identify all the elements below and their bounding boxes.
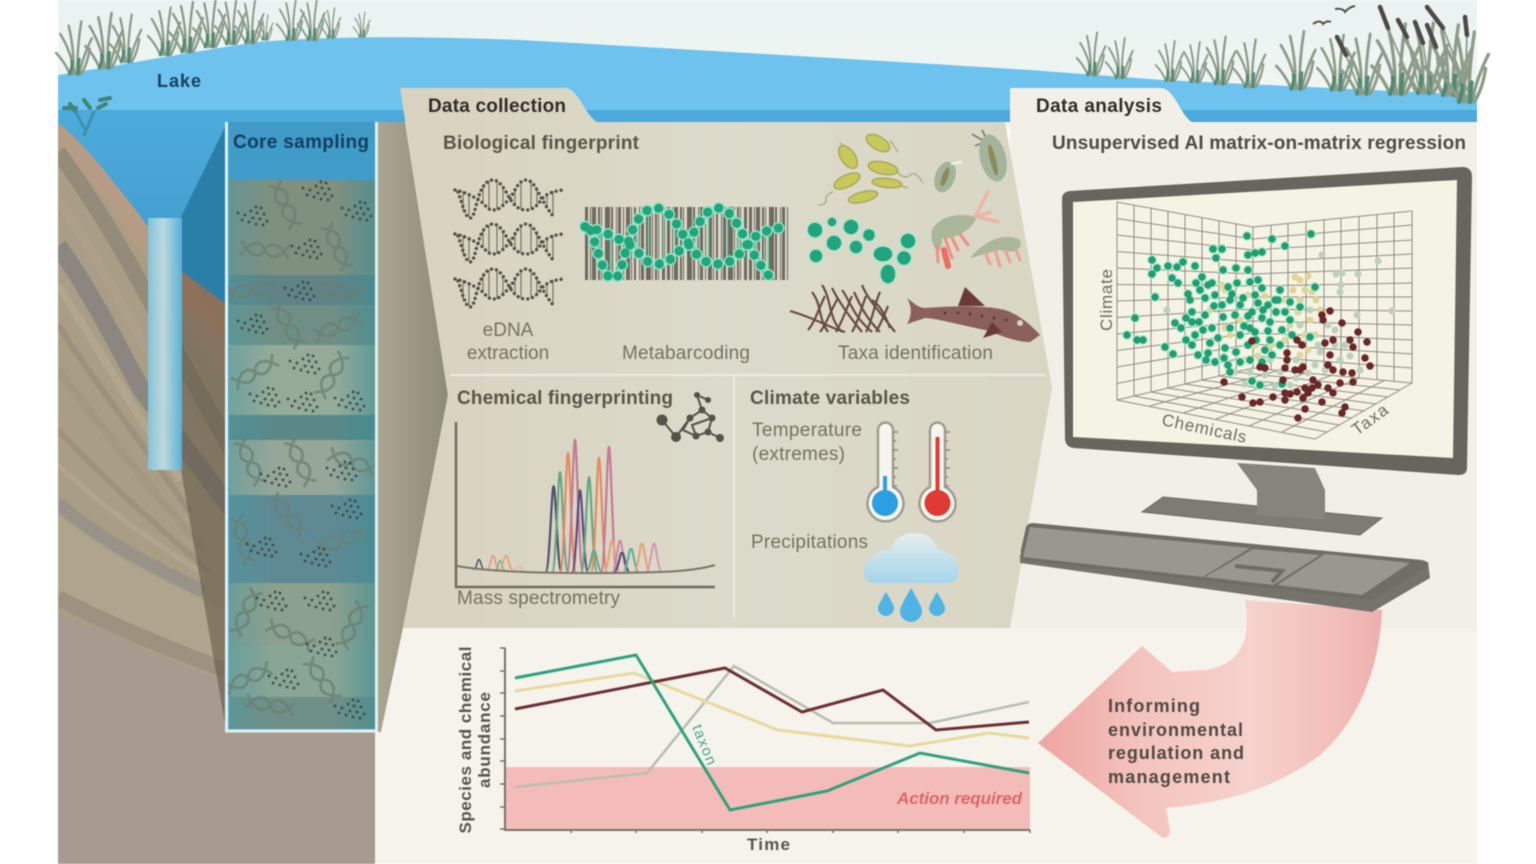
icon: shrimp xyxy=(931,192,1021,266)
arrow text: Informing xyxy=(1108,696,1200,716)
chart: mass spectrometry xyxy=(456,422,715,587)
sediment strata xyxy=(58,120,232,864)
eDNA strands in core xyxy=(223,180,377,718)
arrow text: regulation and xyxy=(1108,743,1244,763)
icon: bacteria xyxy=(818,131,923,205)
maroon points xyxy=(1224,311,1370,418)
metabarcoding label: Metabarcoding xyxy=(622,343,750,364)
icon: zooplankton xyxy=(930,130,1011,195)
shoreline reeds and cattails: right xyxy=(1077,7,1488,102)
shoreline reeds: left xyxy=(56,0,370,74)
connector wedge to data collection xyxy=(377,122,448,732)
action threshold band xyxy=(505,767,1030,829)
chart: abundance over time xyxy=(456,646,1030,854)
icon: cold thermometer xyxy=(868,423,904,521)
icon: birds xyxy=(1313,6,1355,24)
core projection wedge xyxy=(181,125,226,730)
action required label: Action required xyxy=(896,789,1023,808)
biological fingerprint heading: Biological fingerprint xyxy=(443,133,640,154)
yellow points xyxy=(1210,276,1320,365)
icon: rain cloud xyxy=(864,533,959,622)
arrow text: management xyxy=(1108,767,1230,787)
panel: data collection xyxy=(400,88,1052,628)
sediment core in the lake bed xyxy=(148,218,182,470)
arrow text: environmental xyxy=(1108,720,1243,740)
taxon line label: taxon xyxy=(688,722,720,767)
icon: eDNA helices xyxy=(455,180,563,307)
chemical fingerprinting heading: Chemical fingerprinting xyxy=(457,388,673,409)
axis label: chemicals: Chemicals xyxy=(1160,410,1248,447)
mass spectrometry label: Mass spectrometry xyxy=(457,588,620,609)
submerged plant xyxy=(64,98,110,135)
temperature label: Temperature xyxy=(752,420,862,441)
pale points xyxy=(1167,255,1392,386)
icon: hot thermometer xyxy=(920,423,956,521)
line: teal taxon xyxy=(515,655,1029,810)
axis label: taxa: Taxa xyxy=(1348,400,1392,439)
green points xyxy=(1127,234,1315,385)
data collection tab heading: Data collection xyxy=(428,96,566,117)
climate variables heading: Climate variables xyxy=(750,388,910,409)
line: yellow xyxy=(515,673,1029,746)
line: maroon xyxy=(515,668,1029,730)
icon: green algae xyxy=(807,217,916,284)
chart: 3D scatter xyxy=(1097,202,1412,447)
y axis label: Species and chemical xyxy=(456,646,475,834)
lower brown ground xyxy=(225,680,380,864)
panel: core sampling xyxy=(223,122,377,732)
eDNA extraction label: eDNA xyxy=(483,320,534,341)
y axis label line 2: abundance xyxy=(475,692,494,788)
regression heading: Unsupervised AI matrix-on-matrix regression xyxy=(1052,133,1466,154)
icon: keyboard xyxy=(1020,523,1430,612)
panel: data analysis xyxy=(1010,88,1477,628)
precipitations label: Precipitations xyxy=(751,532,868,553)
temperature label: (extremes) xyxy=(752,444,845,465)
axis label: climate: Climate xyxy=(1097,269,1116,331)
icon: monitor xyxy=(1062,167,1472,475)
deep water xyxy=(58,112,378,352)
arrow: informing regulation xyxy=(1038,600,1382,838)
x axis label: Time xyxy=(747,835,790,854)
line: chemical grey xyxy=(515,666,1029,787)
icon: waterweed xyxy=(790,285,895,332)
eDNA extraction label: extraction xyxy=(467,343,549,364)
icon: fish xyxy=(907,287,1040,342)
icon: metabarcoding barcode with helix xyxy=(585,208,788,279)
core sampling heading: Core sampling xyxy=(233,132,369,153)
data analysis tab heading: Data analysis xyxy=(1036,96,1162,117)
icon: molecule xyxy=(658,393,723,441)
icon: computer stand xyxy=(1142,463,1382,535)
lake surface water xyxy=(58,37,1477,122)
sky xyxy=(58,0,1477,130)
taxa identification label: Taxa identification xyxy=(838,343,993,364)
panel: outcome area xyxy=(375,628,1477,864)
lake label: Lake xyxy=(157,71,201,91)
